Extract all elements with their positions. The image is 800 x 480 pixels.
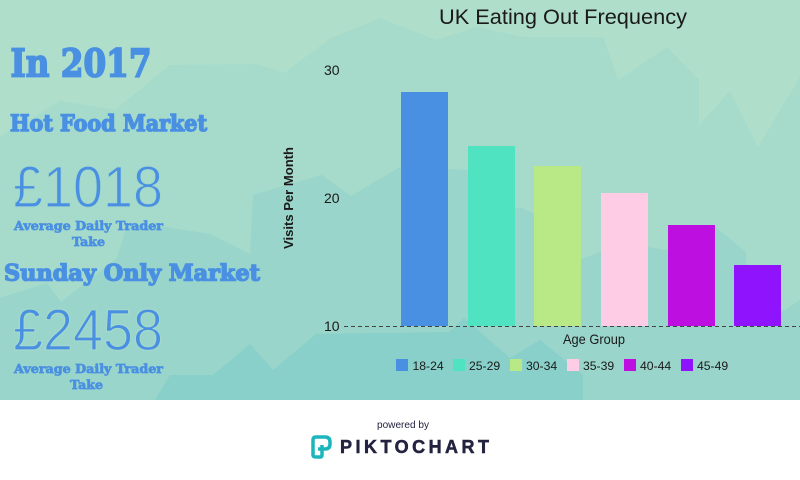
icon: Piktochart logo	[313, 437, 330, 457]
Piktochart wordmark: PIKTOCHART	[340, 437, 489, 457]
x axis title: Age Group	[563, 331, 625, 347]
heading: Sunday Only Market: Sunday Only Market	[4, 260, 261, 286]
heading: Hot Food Market: Hot Food Market	[10, 111, 208, 137]
statistic: hot food take: £1018	[13, 155, 163, 220]
y axis labels	[324, 62, 340, 334]
footer: powered by Piktochart	[0, 400, 800, 480]
bar chart: UK eating out frequency	[281, 6, 800, 373]
statistic: sunday take: £2458	[13, 298, 163, 363]
panel: market statistics	[4, 42, 261, 392]
legend: 25-29	[469, 359, 500, 373]
legend	[396, 359, 728, 373]
y axis labels: 30	[324, 62, 340, 78]
y axis labels: 20	[324, 190, 340, 206]
caption: hot food average daily trader take: Average Daily Trader	[13, 218, 163, 233]
bars	[401, 92, 781, 326]
legend: 40-44	[640, 359, 671, 373]
caption: sunday average daily trader take: Take	[70, 377, 103, 392]
powered by text: powered by	[377, 420, 429, 431]
chart title: UK Eating Out Frequency	[439, 6, 688, 29]
legend: 18-24	[412, 359, 444, 373]
heading: In 2017: In 2017	[10, 42, 152, 86]
legend: 35-39	[583, 359, 614, 373]
caption: sunday average daily trader take: Average Daily Trader	[13, 361, 163, 376]
legend: 30-34	[526, 359, 557, 373]
legend: 45-49	[697, 359, 728, 373]
y axis labels: 10	[324, 318, 340, 334]
y axis title: Visits Per Month	[281, 147, 296, 249]
caption: hot food average daily trader take: Take	[72, 234, 105, 249]
